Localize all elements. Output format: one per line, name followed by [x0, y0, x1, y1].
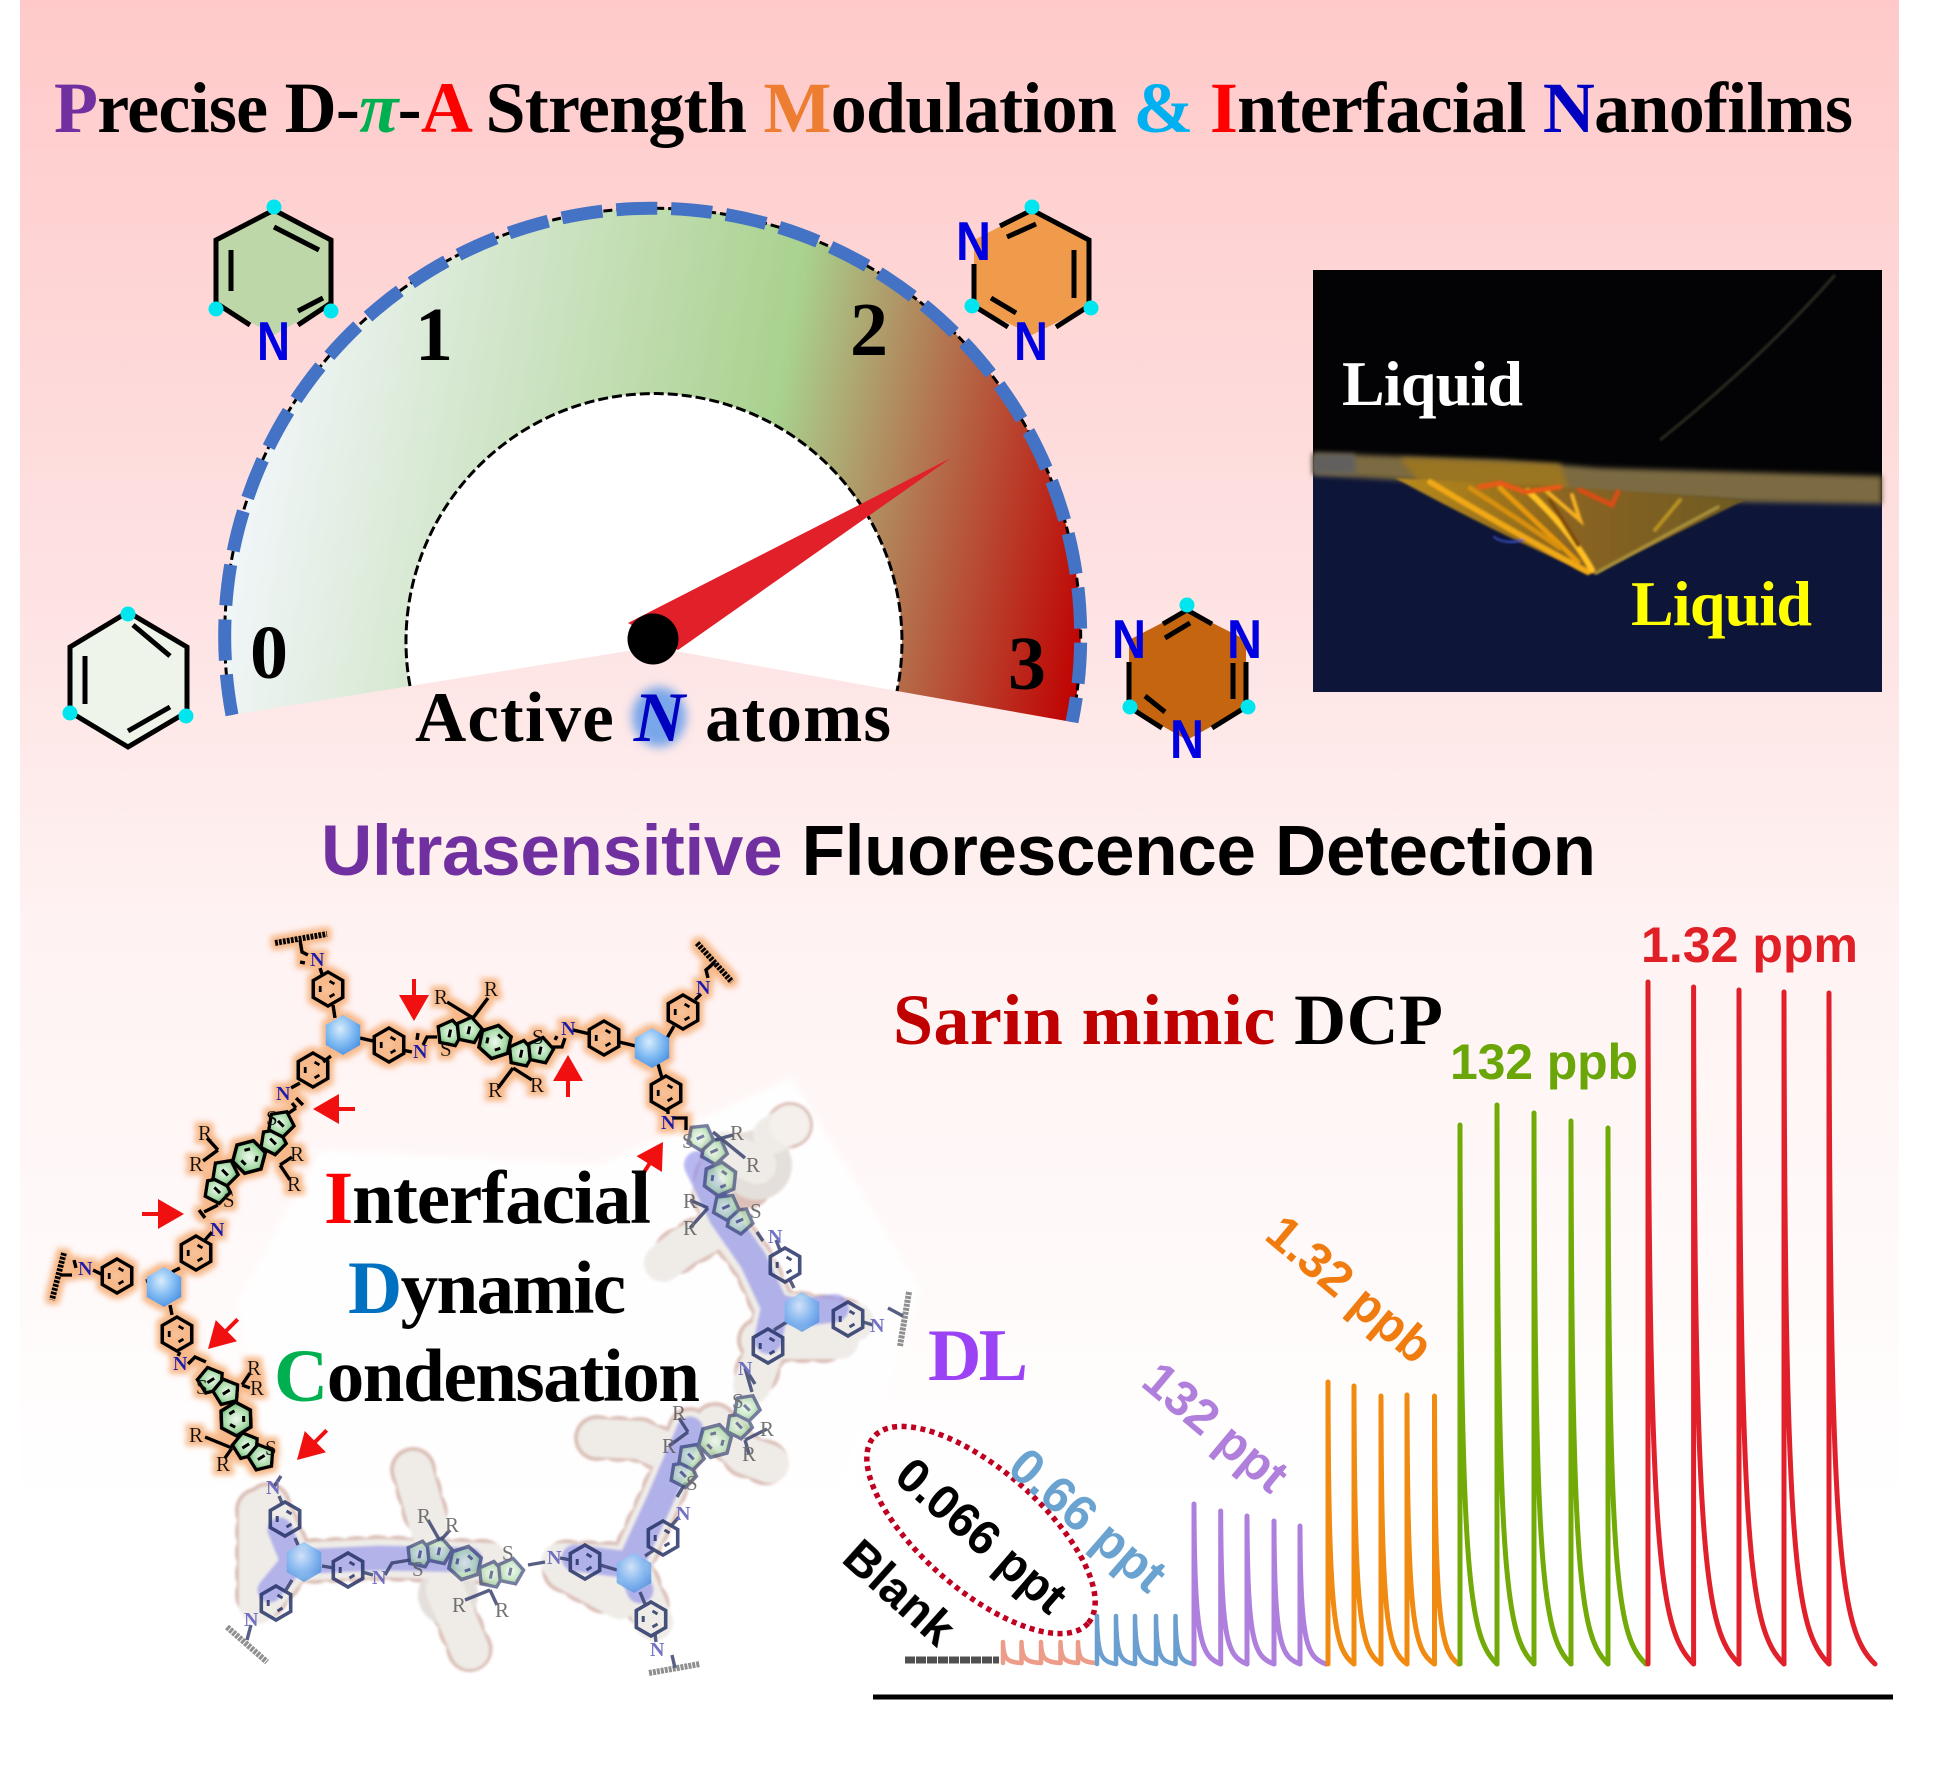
surface: left arm charge spine [270, 1530, 470, 1590]
atom labels: R [189, 1423, 203, 1447]
atom labels: R [530, 1073, 544, 1097]
gauge: active N atoms dial [225, 208, 1081, 757]
molecular ring: faded network over surfaces [227, 1118, 909, 1673]
gauge outer blue dashed arc [225, 208, 1081, 722]
surface: left arm edge beads [258, 1470, 490, 1650]
interface band [1313, 453, 1882, 504]
panel: liquid-liquid interface photo [1313, 270, 1882, 692]
gauge needle [628, 458, 951, 650]
trace: 1.32 ppb [1328, 1382, 1458, 1664]
gauge inner dashed arc [406, 394, 902, 691]
scale number 3: 3 [1008, 622, 1046, 706]
white backdrop behind ring [240, 1077, 920, 1620]
surface: middle arm charge spine [575, 1430, 690, 1590]
icon: triazine ring [1112, 598, 1262, 770]
triazine cores [147, 1015, 669, 1307]
atom labels: R [290, 1142, 304, 1166]
atom labels: S [265, 1436, 277, 1460]
section heading: ultrasensitive fluorescence detection: Ultrasensitive Fluorescence Detection [321, 812, 1596, 891]
faded atom labels: S [750, 1199, 762, 1223]
atom labels: N [310, 949, 325, 971]
faded triazine cores [287, 1292, 819, 1593]
label: 1.32 ppb: 1.32 ppb [1256, 1205, 1443, 1374]
molecular ring: clean network with orange glow [52, 934, 732, 1478]
icon: triazine ring: N [1112, 608, 1146, 670]
atom labels: N [173, 1353, 188, 1375]
atom labels: R [250, 1376, 264, 1400]
atom labels: R [484, 977, 498, 1001]
ring caption: interfacial dynamic condensation: Condensation [274, 1335, 700, 1418]
atom labels: S [266, 1106, 278, 1130]
atom labels: N [78, 1258, 93, 1280]
faded atom labels: R [742, 1442, 756, 1466]
atom labels: R [434, 985, 448, 1009]
ring caption: interfacial dynamic condensation: Dynamic [348, 1247, 626, 1330]
trace: 132 ppt [1194, 1504, 1326, 1664]
trace: 0.066 ppt [1003, 1642, 1096, 1663]
faded atom labels: N [738, 1358, 753, 1380]
fused thiophene units [190, 1011, 557, 1478]
faded atom labels: R [760, 1417, 774, 1441]
surface: middle arm edge beads [560, 1425, 770, 1622]
faded atom labels: S [412, 1557, 424, 1581]
faded atom labels: R [683, 1189, 697, 1213]
faded atom labels [244, 1121, 885, 1661]
faded atom labels: R [683, 1216, 697, 1240]
atom labels: S [223, 1188, 235, 1212]
gauge coloured band [225, 208, 1081, 722]
atom labels: R [198, 1121, 212, 1145]
label: 1.32 ppm: 1.32 ppm [1641, 917, 1858, 973]
faded atom labels: S [686, 1471, 698, 1495]
chart heading: sarin mimic DCP: Sarin mimic DCP [893, 980, 1443, 1060]
surface: middle arm body [560, 1425, 770, 1622]
icon: triazine ring: N [1227, 608, 1262, 670]
atom labels: N [413, 1041, 428, 1063]
atom labels: S [532, 1025, 544, 1049]
icon: pyridine ring [208, 200, 338, 372]
scale number 0: 0 [250, 611, 288, 695]
atom labels: R [488, 1078, 502, 1102]
icon: pyrimidine ring: N [1014, 310, 1048, 372]
faded fused thiophene units [404, 1118, 769, 1592]
icon: benzene ring [62, 606, 194, 747]
faded atom labels: R [730, 1121, 744, 1145]
nanofilm highlights [1430, 482, 1718, 573]
atom labels: S [440, 1037, 452, 1061]
chart: fluorescence response traces [905, 982, 1875, 1664]
atom labels: R [216, 1452, 230, 1476]
gauge outer black dashed arc [225, 208, 1081, 722]
label: 0.66 ppt: 0.66 ppt [998, 1437, 1178, 1603]
faded atom labels: N [676, 1503, 691, 1525]
photo lower navy phase [1313, 470, 1882, 692]
label: 0.066 ppt: 0.066 ppt [885, 1448, 1077, 1624]
atom labels: R [287, 1172, 301, 1196]
faint filament [1660, 275, 1835, 440]
trace: 1.32 ppm [1648, 982, 1875, 1664]
faded atom labels: S [502, 1541, 514, 1565]
electrostatic surface blobs [258, 1105, 855, 1650]
gray band end [1313, 454, 1355, 474]
gold tint over film top [1400, 458, 1570, 490]
ring caption: interfacial dynamic condensation: Interfacial [324, 1157, 651, 1240]
atom labels [78, 949, 711, 1476]
photo label lower liquid: Liquid [1631, 568, 1812, 639]
atom labels: R [189, 1152, 203, 1176]
red reaction arrows [142, 979, 676, 1471]
surface: left arm body [258, 1470, 490, 1650]
faded atom labels: R [452, 1593, 466, 1617]
photo upper dark phase [1313, 270, 1882, 692]
faded atom labels: N [244, 1609, 259, 1631]
atom labels: S [196, 1375, 208, 1399]
faded atom labels: R [417, 1504, 431, 1528]
trace: 0.66 ppt [1097, 1616, 1194, 1664]
faded atom labels: R [672, 1401, 686, 1425]
faded bonds and linkers [247, 1132, 903, 1668]
atom labels: R [247, 1356, 261, 1380]
icon: pyrimidine ring: N [956, 210, 991, 272]
surface: right arm body [663, 1125, 855, 1385]
title: Precise D-π-A Strength Modulation & Interfacial Nanofilms [54, 68, 1853, 148]
faded phenyl rings [261, 1248, 863, 1636]
faded atom labels: R [662, 1434, 676, 1458]
faded atom labels: N [870, 1315, 885, 1337]
atom labels: N [696, 977, 711, 999]
faded atom labels: N [547, 1547, 562, 1569]
bonds and imine linkers [60, 940, 715, 1458]
atom labels: N [561, 1018, 576, 1040]
icon: triazine ring: N [1170, 708, 1204, 770]
faded atom labels: N [768, 1226, 783, 1248]
phenyl rings [102, 972, 698, 1351]
faded atom labels: R [445, 1513, 459, 1537]
atom labels: N [661, 1112, 676, 1134]
icon: pyridine ring: N [257, 310, 290, 372]
chart axis [873, 1694, 1893, 1700]
surface: right arm edge beads [663, 1125, 855, 1385]
surface: right arm upper tint [770, 1105, 810, 1145]
faded atom labels: S [682, 1129, 694, 1153]
label: 132 ppt: 132 ppt [1132, 1352, 1298, 1504]
faded atom labels: N [372, 1567, 387, 1589]
faded atom labels: N [650, 1639, 665, 1661]
faded atom labels: R [746, 1153, 760, 1177]
scale number 2: 2 [850, 288, 888, 372]
surface: right arm big lobe [722, 1130, 792, 1200]
ring caption: interfacial dynamic condensation [274, 1157, 700, 1418]
photo label upper liquid: Liquid [1342, 348, 1523, 419]
atom labels: N [276, 1083, 291, 1105]
gauge caption: Active N atoms [415, 679, 891, 757]
gauge hub [628, 614, 678, 664]
label: blank: Blank [833, 1530, 966, 1657]
scale number 1: 1 [415, 293, 453, 377]
detection limit dotted ellipse [834, 1392, 1128, 1668]
surface anchor bars [52, 934, 732, 1300]
faded atom labels: S [732, 1389, 744, 1413]
faded atom labels: R [495, 1598, 509, 1622]
trace: 132 ppb [1460, 1105, 1646, 1664]
surface: right arm charge spine [698, 1165, 835, 1340]
trace: blank [905, 1656, 999, 1664]
atom labels: N [210, 1219, 225, 1241]
faded atom labels: N [266, 1477, 281, 1499]
nanofilm [1395, 478, 1745, 574]
faded anchor bars [227, 1292, 909, 1673]
icon: pyrimidine ring [956, 200, 1098, 372]
gauge inner white face [406, 394, 902, 691]
label: 132 ppb: 132 ppb [1450, 1034, 1638, 1090]
glow behind N [632, 687, 686, 747]
surface: left arm lobe [418, 1565, 478, 1625]
chart label DL: DL [928, 1315, 1028, 1397]
